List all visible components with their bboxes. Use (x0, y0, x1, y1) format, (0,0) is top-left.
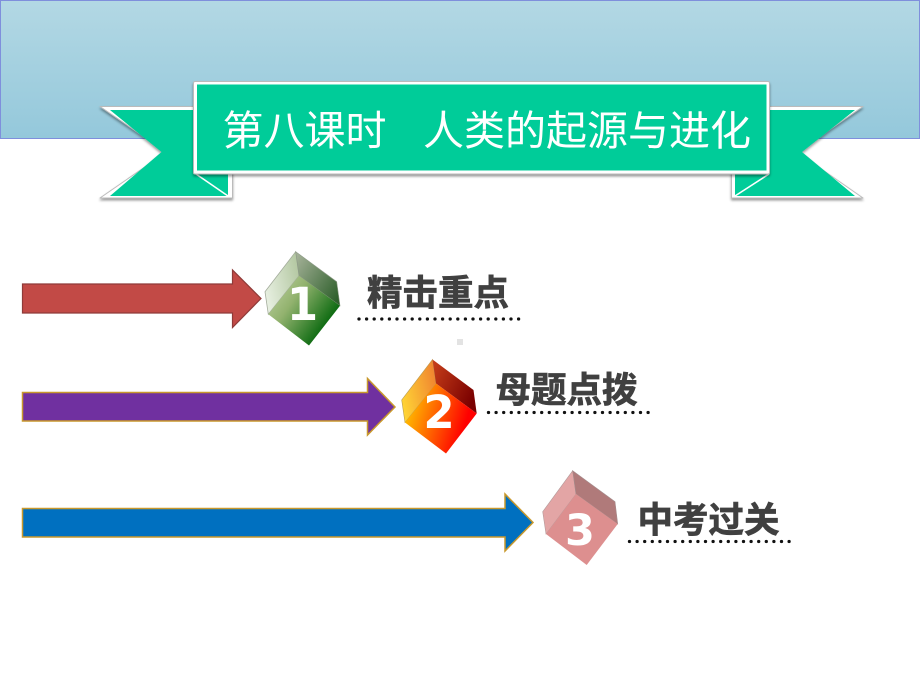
ribbon: main title banner (194, 82, 770, 174)
icon: cube 2 (402, 360, 477, 454)
dotted underline 1 (359, 317, 520, 321)
title text: 人类的起源与进化 (423, 108, 751, 154)
number 1: 1 (287, 278, 318, 331)
ribbon: left tail (100, 106, 232, 198)
icon: cube 1 (265, 252, 340, 346)
heading: 中考过关: 中考过关 (638, 500, 780, 540)
arrow 2: purple (22, 378, 395, 435)
dotted underline 2 (488, 411, 649, 414)
ribbon: right tail (732, 106, 863, 198)
heading: 精击重点: 精击重点 (367, 273, 509, 313)
small grey square (457, 339, 463, 345)
dotted underline 3 (630, 540, 790, 543)
header background band (0, 0, 920, 138)
heading: 母题点拨: 母题点拨 (496, 370, 638, 410)
number 3: 3 (565, 506, 595, 556)
number 2: 2 (423, 386, 455, 439)
arrow 1: red (22, 270, 261, 328)
arrow 3: blue (22, 494, 533, 551)
icon: cube 3 (543, 471, 618, 565)
title text: 第八课时 (222, 108, 386, 154)
